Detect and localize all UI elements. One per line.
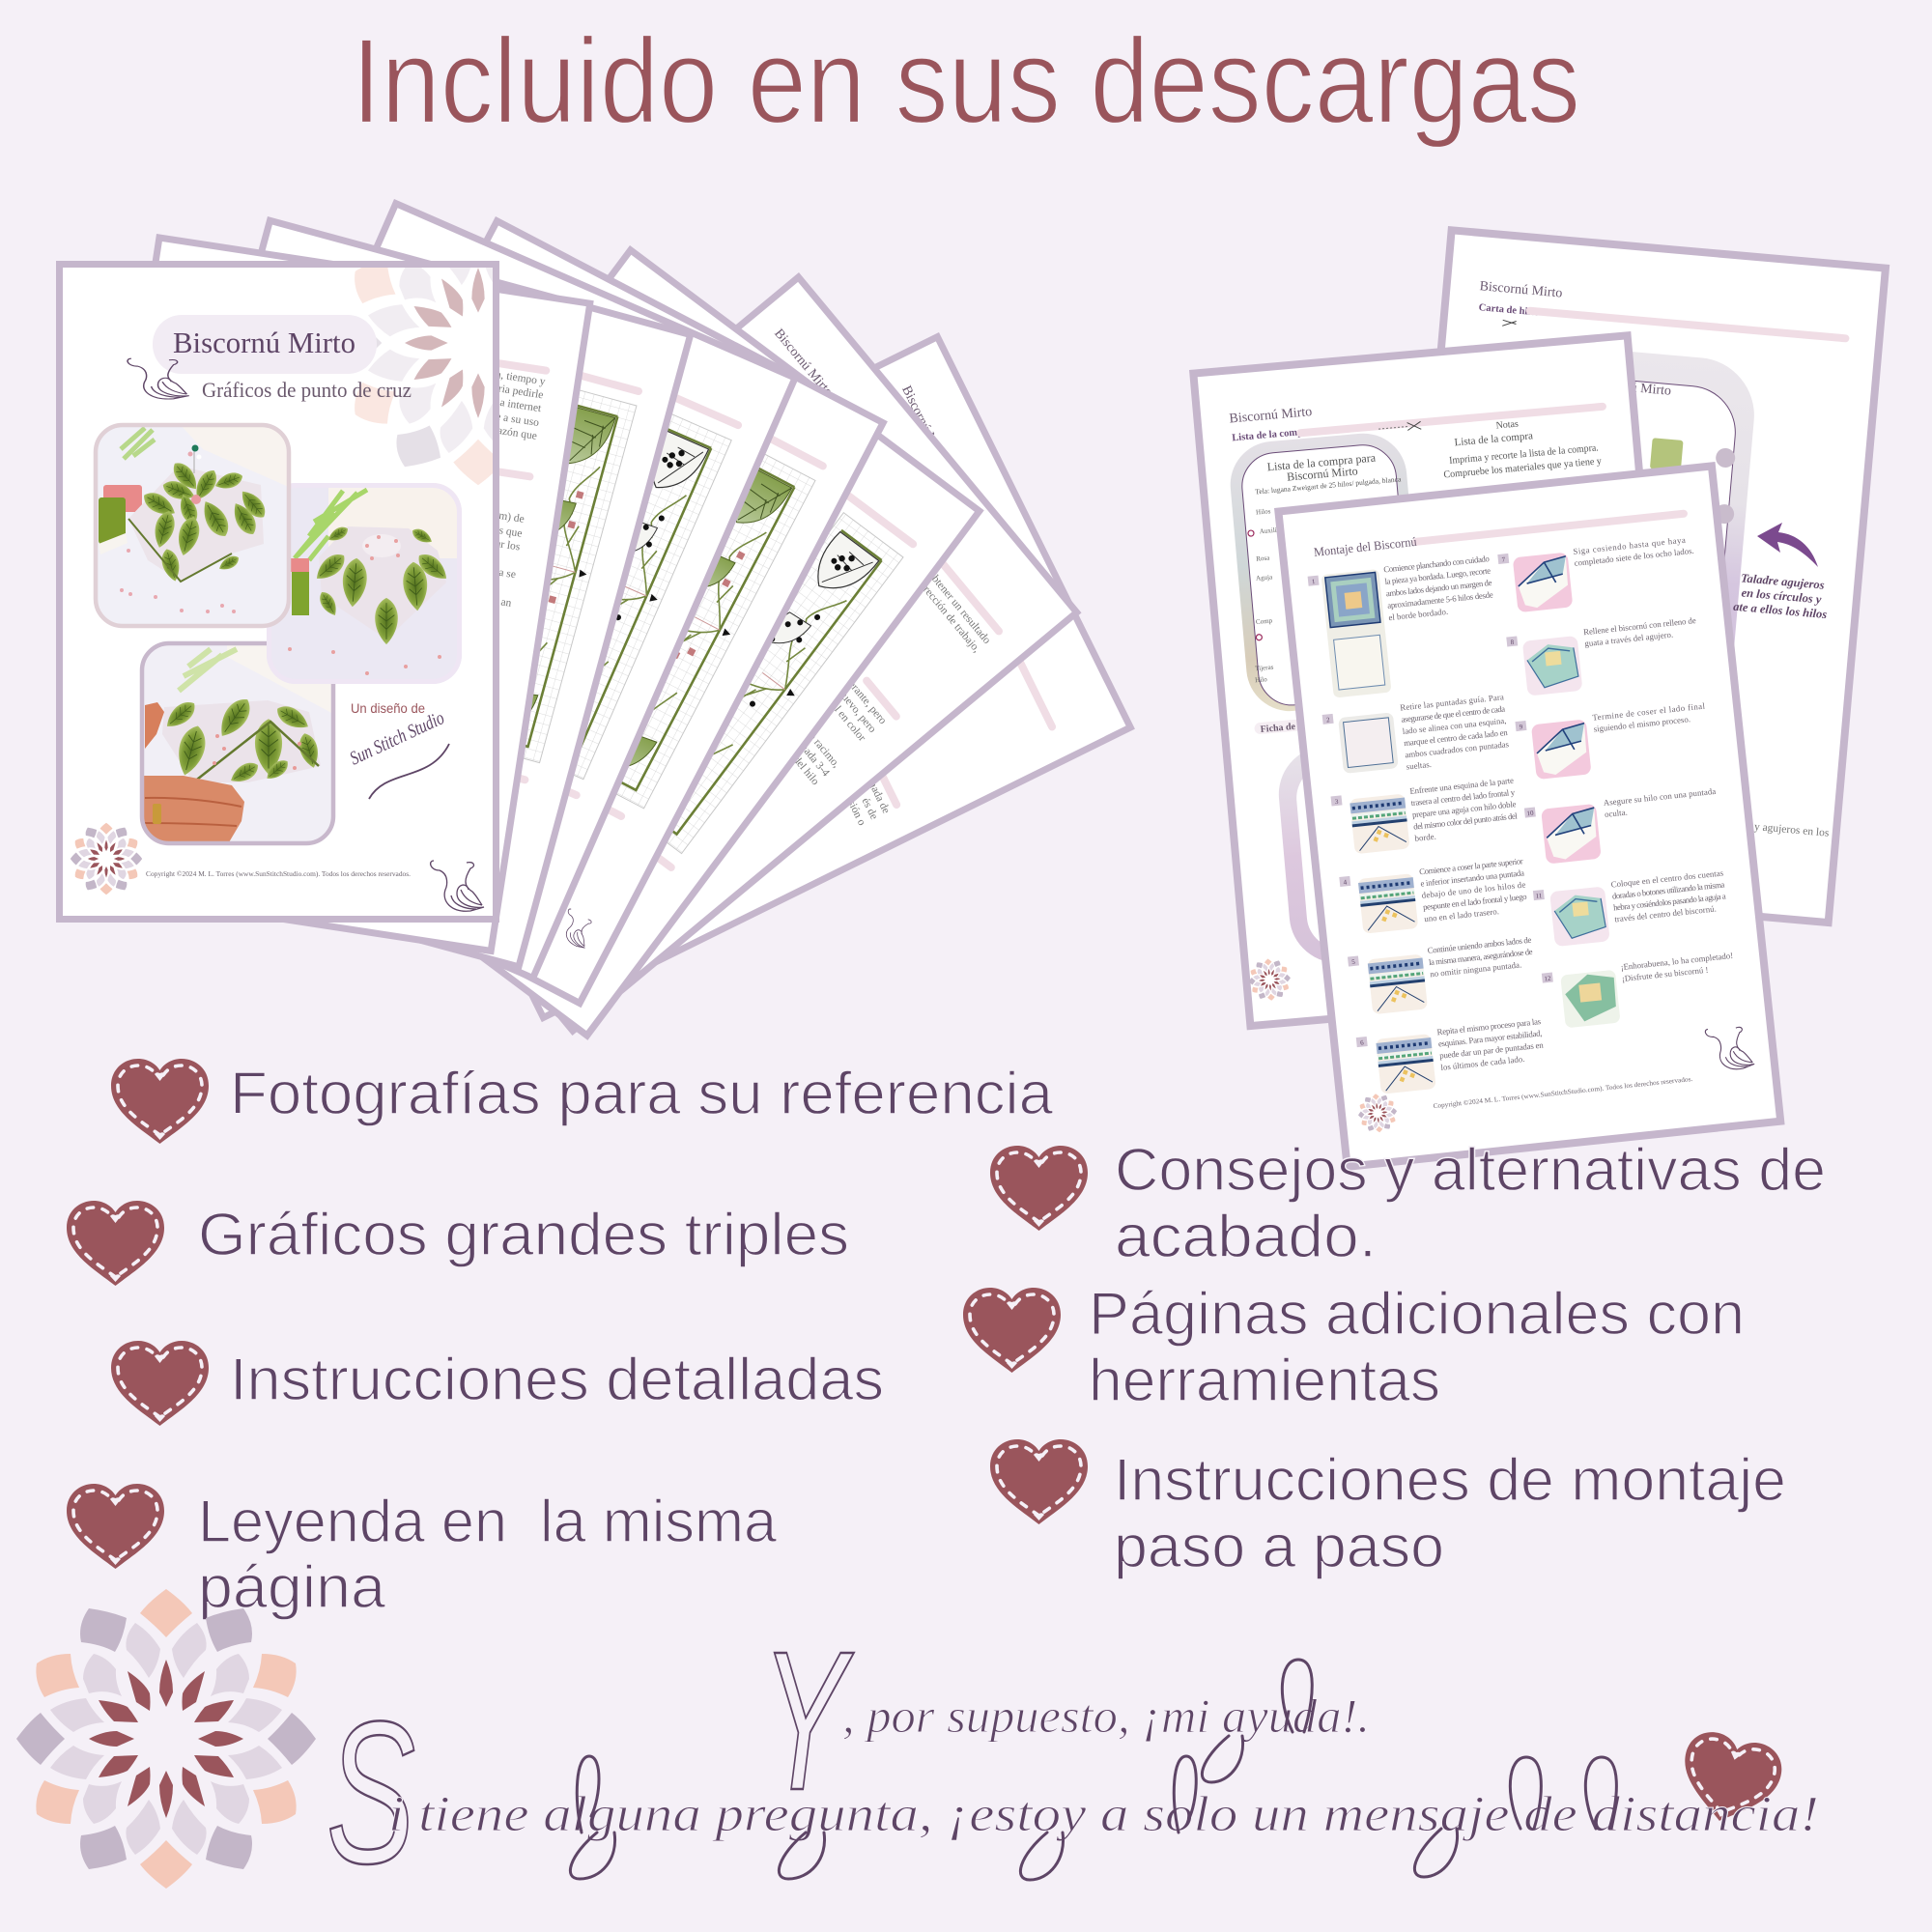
cover title pill: Biscornú Mirto: [173, 326, 355, 359]
page 4 of fan with chart: [193, 221, 883, 1004]
item: extra pages: Páginas adicionales con: [1089, 1281, 1745, 1348]
fan of pattern pages: [60, 201, 1130, 1036]
step instructions, left column: marque el centro de cada lado en: [1404, 727, 1509, 748]
page 1 of fan with text: razón que: [493, 424, 538, 442]
notes text: Compruebe los materiales que ya tiene y: [1443, 456, 1603, 480]
step instructions, left column: debajo de uno de los hilos de: [1421, 880, 1526, 900]
list page mandala: [1247, 957, 1293, 1003]
signature: Sun Stitch Studio: [347, 707, 447, 770]
notes text: Imprima y recorte la lista de la compra.: [1449, 442, 1599, 467]
step instructions, left column: Comience planchando con cuidado: [1383, 554, 1491, 574]
hole instructions: ate a ellos los hilos: [1733, 600, 1828, 621]
step instructions, right column: Asegure su hilo con una puntada: [1603, 786, 1717, 808]
step instructions, left column: prepare una aguja con hilo doble: [1411, 799, 1517, 819]
item: photographs: Fotografías para su referencia: [230, 1061, 1054, 1127]
item: legend on the same page: página: [198, 1554, 386, 1621]
title: Incluido en sus descargas: [352, 14, 1580, 149]
page 1 of fan with text: ón, tiempo y: [489, 368, 547, 388]
step number badges: 2: [1326, 716, 1330, 724]
item: assembly: Instrucciones de montaje: [1114, 1447, 1786, 1514]
page 6 of fan: nuevo, pero: [836, 688, 878, 735]
page 1 of fan with text: [60, 238, 590, 951]
page 7 of fan: nada de: [867, 780, 892, 815]
item: photographs: [111, 1059, 1054, 1144]
panel: back page, thread chart: Biscornú Mirto: [1479, 279, 1563, 301]
photo 2: biscornu side view: [267, 483, 462, 684]
step instructions, left column: borde.: [1414, 832, 1436, 843]
large mandala: [16, 1589, 316, 1889]
photo 3: biscornu in hand: [140, 641, 335, 845]
step number badges: 5: [1351, 958, 1356, 966]
panel: shopping list page: [1193, 335, 1685, 1026]
step instructions, left column: los últimos de cada lado.: [1440, 1054, 1525, 1072]
panel: finishing steps page: [1278, 466, 1780, 1167]
page 2 of fan with chart: [99, 220, 691, 967]
shopping list card: Auxiliar: [1260, 526, 1283, 535]
panel: shopping list page: Lista de la compra: [1232, 426, 1314, 443]
item: tips: acabado.: [1115, 1204, 1377, 1270]
step number badges: 4: [1343, 878, 1348, 887]
step instructions, right column: oculta.: [1604, 808, 1628, 819]
panel: back page, thread chart: [1394, 230, 1886, 923]
page 1 of fan with text: da se: [493, 566, 517, 581]
step instructions, left column: uno en el lado trasero.: [1424, 906, 1499, 923]
page 3 of fan with chart: [133, 204, 795, 978]
shopping list card: Biscornú Mirto: [1287, 464, 1358, 484]
scissors and dashed cut line: [1378, 421, 1421, 433]
step instructions, left column: sueltas.: [1406, 759, 1432, 772]
step instructions, left column: lado se alinea con una esquina,: [1402, 716, 1507, 736]
step instructions, left column: asegurarse de que el centro de cada: [1401, 703, 1506, 724]
page 6 of fan: [295, 277, 1077, 1031]
hole instructions: en los círculos y: [1741, 585, 1822, 607]
hole instructions: [1733, 571, 1831, 621]
page 7 of fan: [351, 337, 1130, 1017]
item: detailed instructions: [111, 1341, 884, 1426]
step instructions, right column: ¡Disfrute de su biscornú !: [1621, 965, 1709, 983]
step instructions, right column: Termine de coser el lado final: [1592, 700, 1706, 723]
step number badges: 11: [1535, 892, 1543, 900]
step instructions, left column: esquinas. Para mayor estabilidad,: [1437, 1028, 1543, 1049]
page 1 of fan with text: aria pedirle: [493, 383, 544, 401]
page 7 of fan: Biscornú Mirto: [898, 384, 949, 465]
item: detailed instructions: Instrucciones detalladas: [230, 1347, 884, 1413]
signature: [347, 707, 449, 799]
script swashes: [570, 1660, 1616, 1880]
step instructions, left column: e inferior insertando una puntada: [1420, 867, 1524, 889]
page 6 of fan: pel en color: [825, 696, 867, 744]
step number badges: 12: [1544, 975, 1551, 982]
step number badges: 1: [1312, 578, 1316, 585]
step number badges: 6: [1360, 1038, 1365, 1047]
page 1 of fan with text: os que: [493, 524, 523, 540]
step instructions, right column: completado siete de los ocho lados.: [1574, 546, 1694, 568]
steps page copyright: Copyright ©2024 M. L. Torres (www.SunStitchStudio.com). Todos los derechos reservados.: [1433, 1075, 1693, 1110]
step instructions, right column: través del centro del biscornú.: [1614, 903, 1717, 923]
cover title pill: [153, 315, 377, 374]
steps page flourish: [1705, 1025, 1755, 1072]
cover flourish: [431, 861, 484, 911]
shopping list card: Aguja: [1256, 573, 1273, 582]
shopping list card: Hilo: [1255, 675, 1268, 684]
thread card frame: Biscornú Mirto: [1588, 377, 1672, 399]
step instructions, right column: Siga cosiendo hasta que haya: [1573, 535, 1686, 556]
step instructions, left column: trasera al centro del lado frontal y: [1410, 787, 1516, 808]
page 1 of fan with text: ar los: [495, 538, 522, 554]
back page flourish: [1706, 867, 1748, 909]
step instructions, left column: [1383, 554, 1546, 1073]
step number badges: 10: [1526, 810, 1534, 817]
item: extra pages: herramientas: [1089, 1348, 1440, 1414]
designer credit: Un diseño de: [351, 700, 425, 716]
project sheet label: Ficha de proyecto: [1260, 718, 1334, 735]
page 6 of fan: perante, pero: [842, 674, 889, 726]
step instructions, left column: ambos lados dejando un margen de: [1385, 578, 1492, 598]
step instructions, left column: Continúe uniendo ambos lados de: [1427, 935, 1532, 955]
page 6 of fan: dirección de trabajo,: [915, 578, 982, 655]
step instructions, right column: ¡Enhorabuena, lo ha completado!: [1620, 951, 1734, 972]
closing heart: [1672, 1726, 1787, 1833]
step number badges: 9: [1519, 723, 1523, 731]
shopping list card: Hilos: [1256, 507, 1271, 517]
step instructions, right column: guata a través del agujero.: [1584, 630, 1674, 648]
step instructions, left column: aproximadamente 5-6 hilos desde: [1387, 589, 1493, 611]
page 1 of fan with text: an: [500, 596, 512, 610]
list: right column: [963, 1137, 1826, 1580]
page 1 of fan with text: re a su uso: [492, 411, 540, 429]
page 6 of fan: del hilo: [790, 754, 821, 787]
cover small mandala: [71, 823, 142, 895]
shopping list card: [1227, 430, 1427, 715]
step number badges: 8: [1510, 639, 1515, 646]
cover copyright: Copyright ©2024 M. L. Torres (www.SunStitchStudio.com). Todos los derechos reservados.: [146, 870, 411, 878]
shopping list card: Lista de la compra para: [1266, 450, 1377, 473]
panel: cover page: [56, 261, 499, 923]
list: left column: [67, 1059, 1054, 1621]
script line 2: i tiene alguna pregunta, ¡estoy a solo un mensaje de distancia!: [388, 1787, 1819, 1842]
hole instructions: Taladre agujeros: [1741, 571, 1825, 592]
step instructions, right column: [1573, 534, 1738, 983]
item: extra pages: [963, 1281, 1745, 1414]
cover subtitle: Gráficos de punto de cruz: [202, 378, 412, 402]
second card: [1275, 730, 1524, 967]
panel: shopping list page: Biscornú Mirto: [1229, 405, 1313, 427]
script line 1: , por supuesto, ¡mi ayuda!.: [842, 1689, 1370, 1743]
step instructions, left column: el borde bordado.: [1388, 607, 1448, 622]
step instructions, right column: siguiendo el mismo proceso.: [1593, 714, 1690, 734]
script line 1: [761, 1610, 1370, 1832]
item: assembly: paso a paso: [1114, 1514, 1444, 1580]
item: triple charts: Gráficos grandes triples: [198, 1202, 849, 1268]
page 5 of fan with chart: Biscornú Mirto: [620, 303, 695, 365]
scissors on back page: [1502, 320, 1517, 327]
notes text: Notas: [1495, 419, 1519, 432]
page 5 of fan with chart: [239, 250, 980, 1036]
step instructions, left column: pespunte en el lado frontal y luego: [1422, 892, 1528, 912]
step instructions, left column: la misma manera, asegurándose de: [1428, 947, 1533, 967]
page 6 of fan: o racimo,: [807, 730, 842, 770]
step instructions, left column: del mismo color del punto atrás del: [1413, 810, 1519, 832]
item: tips: [990, 1137, 1826, 1270]
page 1 of fan with text: r a internet: [493, 396, 543, 414]
step number badges: 3: [1334, 798, 1339, 806]
step instructions, left column: Enfrente una esquina de la parte: [1409, 776, 1514, 796]
item: triple charts: [67, 1201, 849, 1286]
step instructions, right column: Rellene el biscornú con relleno de: [1583, 615, 1696, 637]
photo 1: biscornu from above: [94, 423, 291, 628]
script line 1: Y: [761, 1610, 855, 1832]
notes text: [1439, 412, 1603, 480]
step instructions, right column: doradas o botones utilizando la misma: [1611, 879, 1725, 901]
steps page mandala: [1356, 1092, 1399, 1134]
page 1 of fan with text: (cm) de: [490, 509, 526, 526]
panel: back page, thread chart: Carta de hilos: [1478, 302, 1540, 319]
page 7 of fan: sión o: [845, 798, 867, 828]
step number badges: 7: [1501, 555, 1506, 564]
step instructions, left column: Retire las puntadas guía. Para: [1400, 692, 1504, 712]
shopping list card: Rosa: [1256, 554, 1271, 563]
drill note: y agujeros en los: [1753, 821, 1830, 839]
step instructions, right column: Coloque en el centro dos cuentas: [1610, 867, 1724, 890]
closing script message: [327, 1610, 1819, 1906]
panel: finishing steps page: Montaje del Biscornú: [1313, 534, 1418, 559]
item: legend on the same page: [67, 1484, 778, 1621]
step number badges: [1307, 554, 1558, 1047]
step instructions, right column: hebra y cosiéndolos pasando la aguja a: [1613, 891, 1726, 913]
shopping list card: Comp: [1256, 616, 1273, 626]
item: tips: Consejos y alternativas de: [1115, 1137, 1826, 1204]
step photos: [1321, 549, 1626, 1094]
cover swirl: [128, 358, 189, 399]
step instructions, left column: ambos cuadrados con puntadas: [1405, 739, 1510, 759]
step instructions, left column: no omitir ninguna puntada.: [1430, 959, 1522, 979]
page 7 of fan: és de: [860, 796, 880, 821]
script line 2: [327, 1679, 1819, 1906]
cover mandala: [355, 268, 493, 485]
shopping list card: Tela: lugana Zweigart de 25 hilos/ pulgada, blanca: [1255, 474, 1402, 497]
arrow: to the holes: [1757, 523, 1818, 567]
script line 2: S: [327, 1679, 415, 1906]
page 6 of fan: Biscornú Mirto: [771, 327, 836, 400]
step instructions, left column: la pieza ya bordada. Luego, recorte: [1384, 565, 1492, 586]
shopping list card: Tijeras: [1255, 664, 1274, 672]
page 6 of fan: nada 3-4: [798, 742, 832, 779]
step instructions, left column: puede dar un par de puntadas en: [1439, 1039, 1545, 1061]
notes text: Lista de la compra: [1454, 430, 1533, 448]
item: assembly: [990, 1439, 1786, 1580]
thread card frame: [1509, 344, 1759, 767]
item: legend on the same page: Leyenda en la misma: [198, 1489, 778, 1555]
step instructions, left column: Comience a coser la parte superior: [1419, 856, 1523, 876]
step instructions, left column: Repita el mismo proceso para las: [1436, 1016, 1542, 1037]
page 6 of fan: a obtener un resultado: [921, 563, 993, 646]
